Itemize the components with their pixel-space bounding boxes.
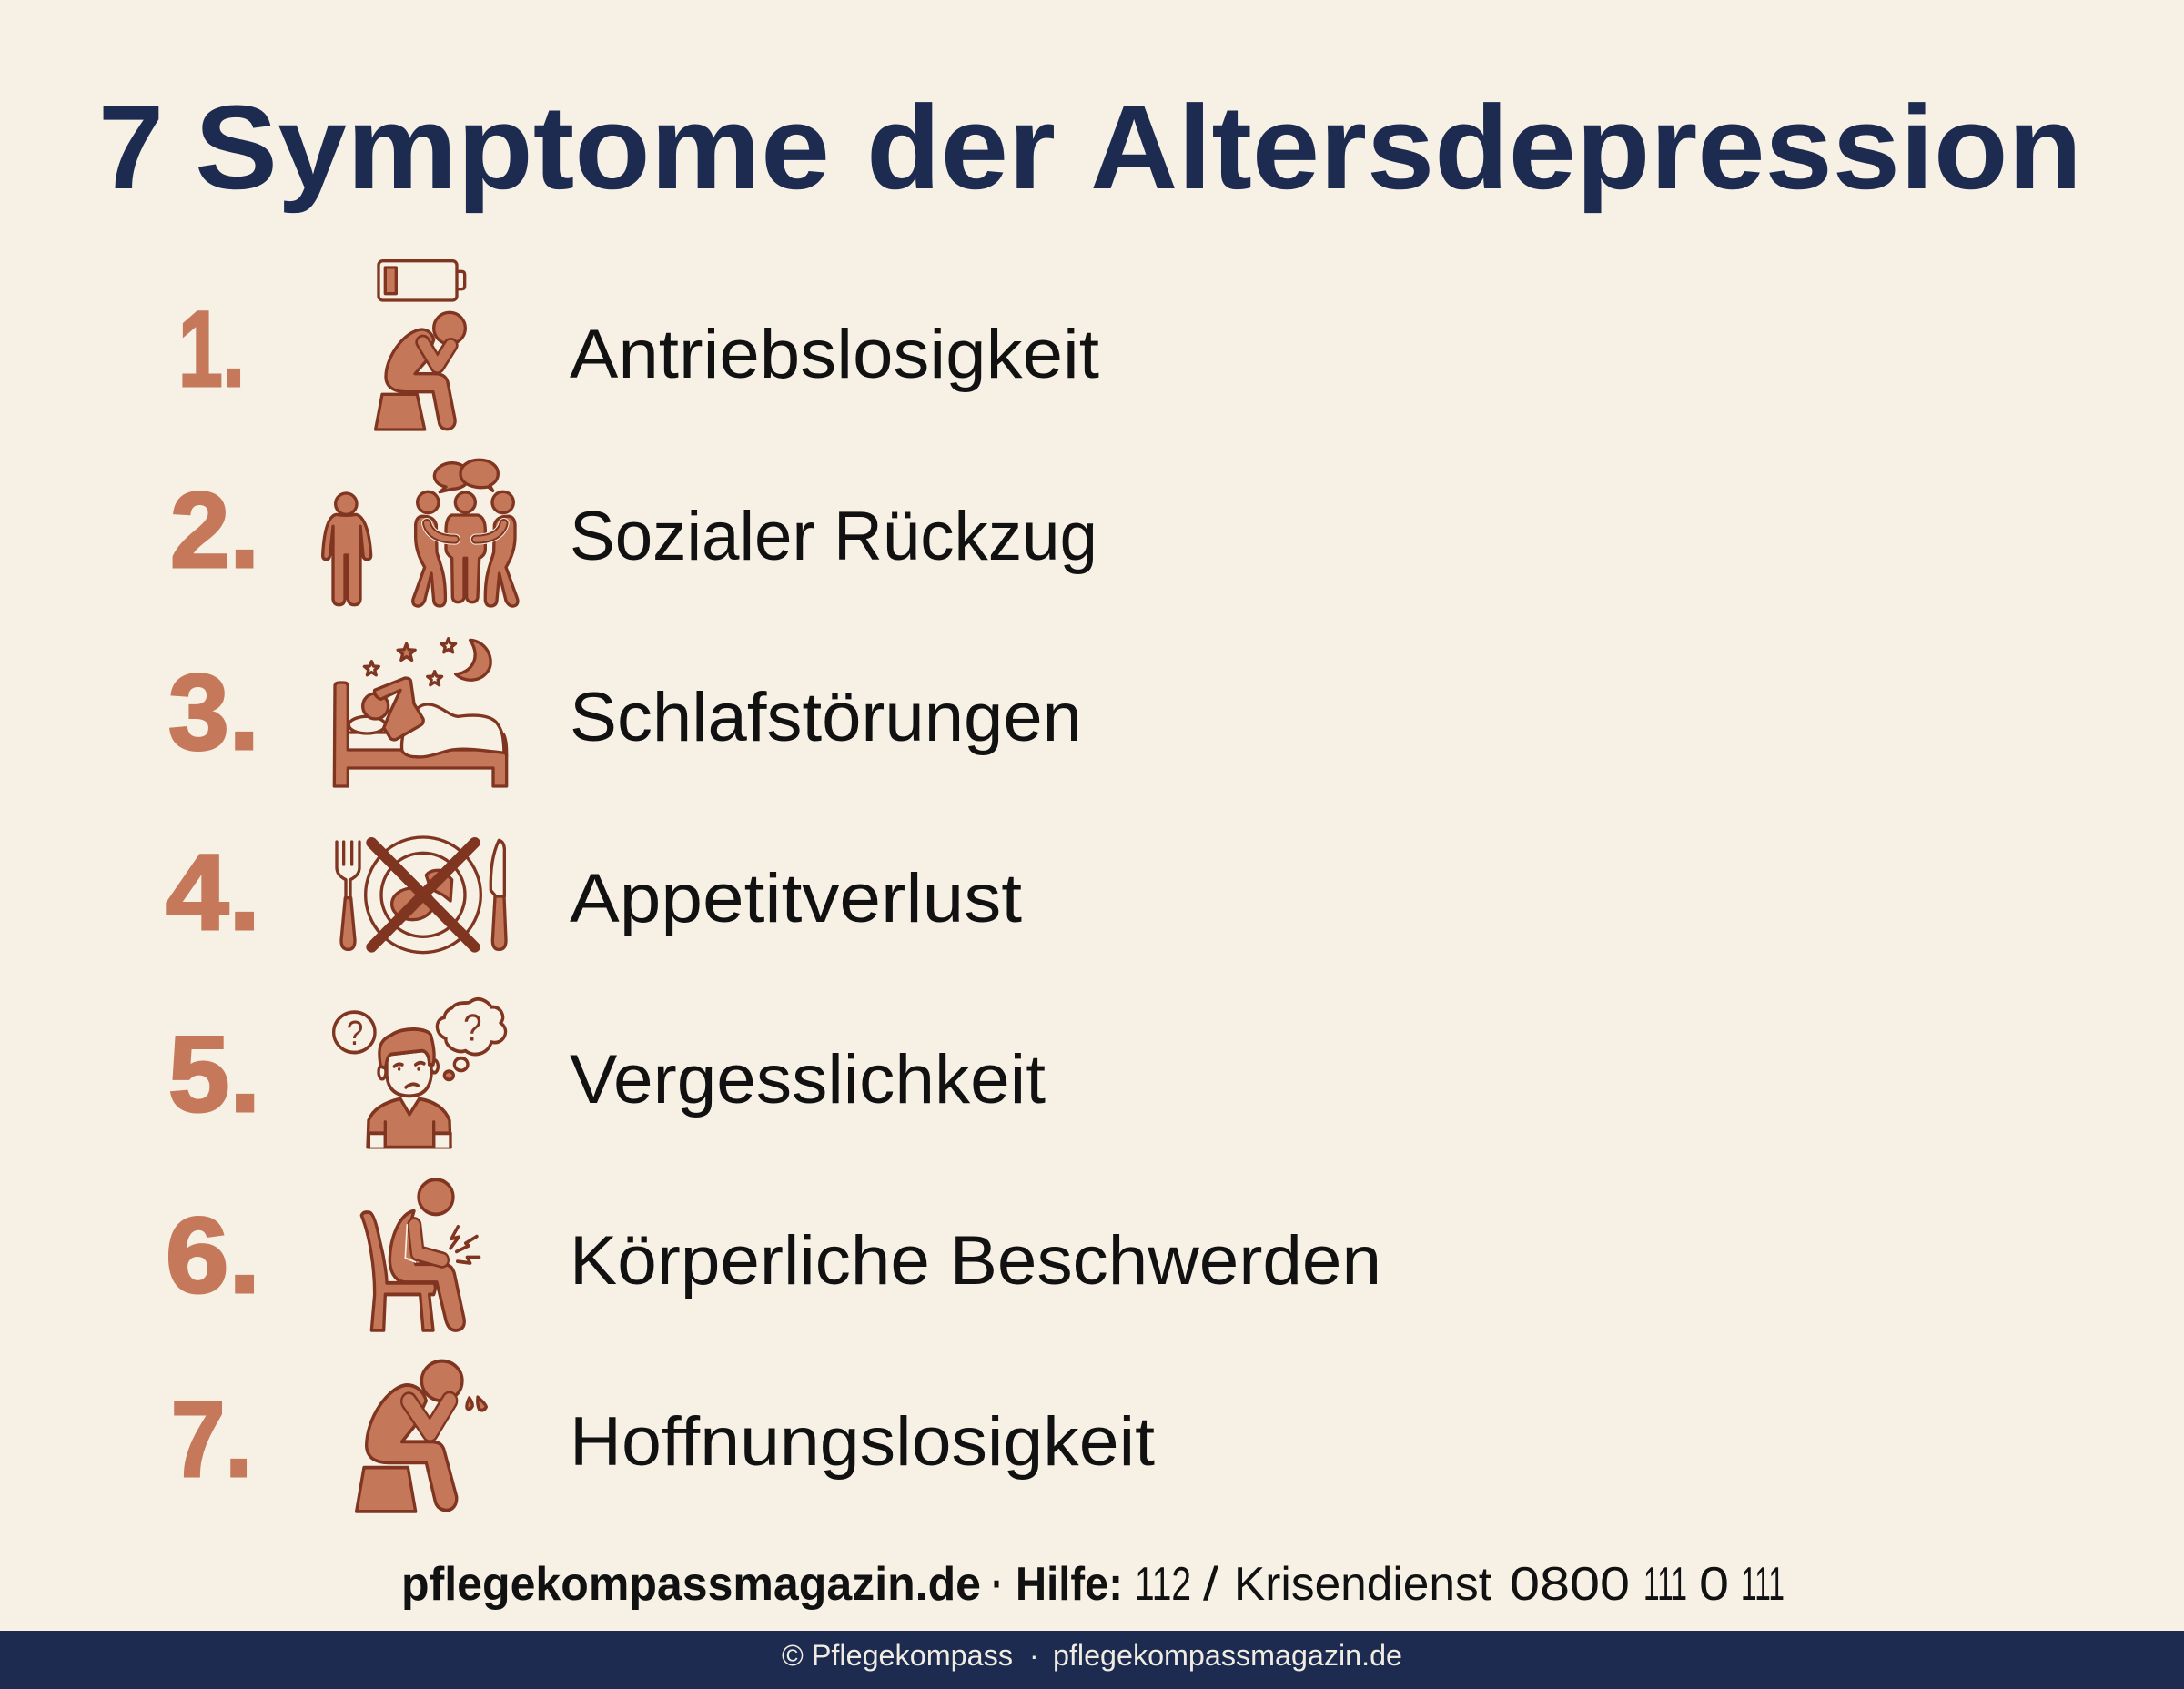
help line — [401, 1558, 1785, 1611]
title — [98, 80, 2082, 214]
label 6: Körperliche Beschwerden — [570, 1222, 1381, 1300]
label 3: Schlafstörungen — [570, 679, 1082, 756]
icon: person with head in hands and tears — [357, 1361, 486, 1512]
icon: crossed-out plate with fork and knife — [337, 837, 506, 953]
row 3: Schlafstörungen — [168, 639, 1082, 786]
icon: confused man with question marks — [334, 999, 506, 1148]
row 7: Hoffnungslosigkeit — [171, 1361, 1155, 1512]
number 5: 5. — [168, 1015, 260, 1135]
number 3: 3. — [168, 652, 259, 773]
bold website and help text: Hilfe: — [1016, 1558, 1123, 1611]
number 7: 7. — [171, 1380, 252, 1500]
label 1: Antriebslosigkeit — [570, 316, 1099, 393]
label 4: Appetitverlust — [570, 860, 1022, 937]
title: Altersdepression — [1090, 80, 2082, 214]
row 5: Vergesslichkeit — [168, 999, 1046, 1148]
bold website and help text: · — [992, 1558, 1003, 1611]
icon: person on chair with stomach pain — [361, 1179, 480, 1330]
label 5: Vergesslichkeit — [570, 1041, 1046, 1118]
title: 7 — [98, 80, 164, 214]
label 2: Sozialer Rückzug — [570, 498, 1097, 575]
row 1: Antriebslosigkeit — [178, 261, 1099, 430]
number 6: 6. — [166, 1196, 260, 1316]
crisis numbers: 111 — [1643, 1558, 1687, 1611]
icon: low battery and seated person — [376, 261, 465, 430]
row 4: Appetitverlust — [166, 833, 1022, 953]
crisis numbers: / — [1203, 1558, 1219, 1611]
crisis numbers: 0 — [1699, 1558, 1729, 1611]
row 6: Körperliche Beschwerden — [166, 1179, 1381, 1330]
label 7: Hoffnungslosigkeit — [570, 1403, 1155, 1481]
crisis numbers: 0800 — [1510, 1558, 1630, 1611]
crisis numbers — [1135, 1558, 1785, 1611]
icon: lone person beside talking group — [323, 460, 518, 606]
title: Symptome — [195, 80, 830, 214]
number 4: 4. — [166, 833, 260, 953]
icon: sleepless person in bed with stars and moon — [334, 639, 507, 786]
title: der — [866, 80, 1056, 214]
crisis numbers: Krisendienst — [1234, 1558, 1492, 1611]
crisis numbers: 112 — [1135, 1558, 1191, 1611]
footer text: · — [1029, 1639, 1039, 1672]
footer text: © Pflegekompass — [782, 1639, 1013, 1672]
crisis numbers: 111 — [1741, 1558, 1785, 1611]
number 2: 2. — [170, 470, 259, 591]
icon: confused man with question marks: ? — [463, 1006, 482, 1049]
row 2: Sozialer Rückzug — [170, 460, 1097, 606]
footer text — [782, 1639, 1402, 1672]
icon: confused man with question marks: ? — [347, 1014, 363, 1053]
number 1: 1. — [178, 289, 245, 410]
footer bar — [0, 1631, 2184, 1689]
footer text: pflegekompassmagazin.de — [1053, 1639, 1402, 1672]
bold website and help text: pflegekompassmagazin.de — [401, 1558, 981, 1611]
